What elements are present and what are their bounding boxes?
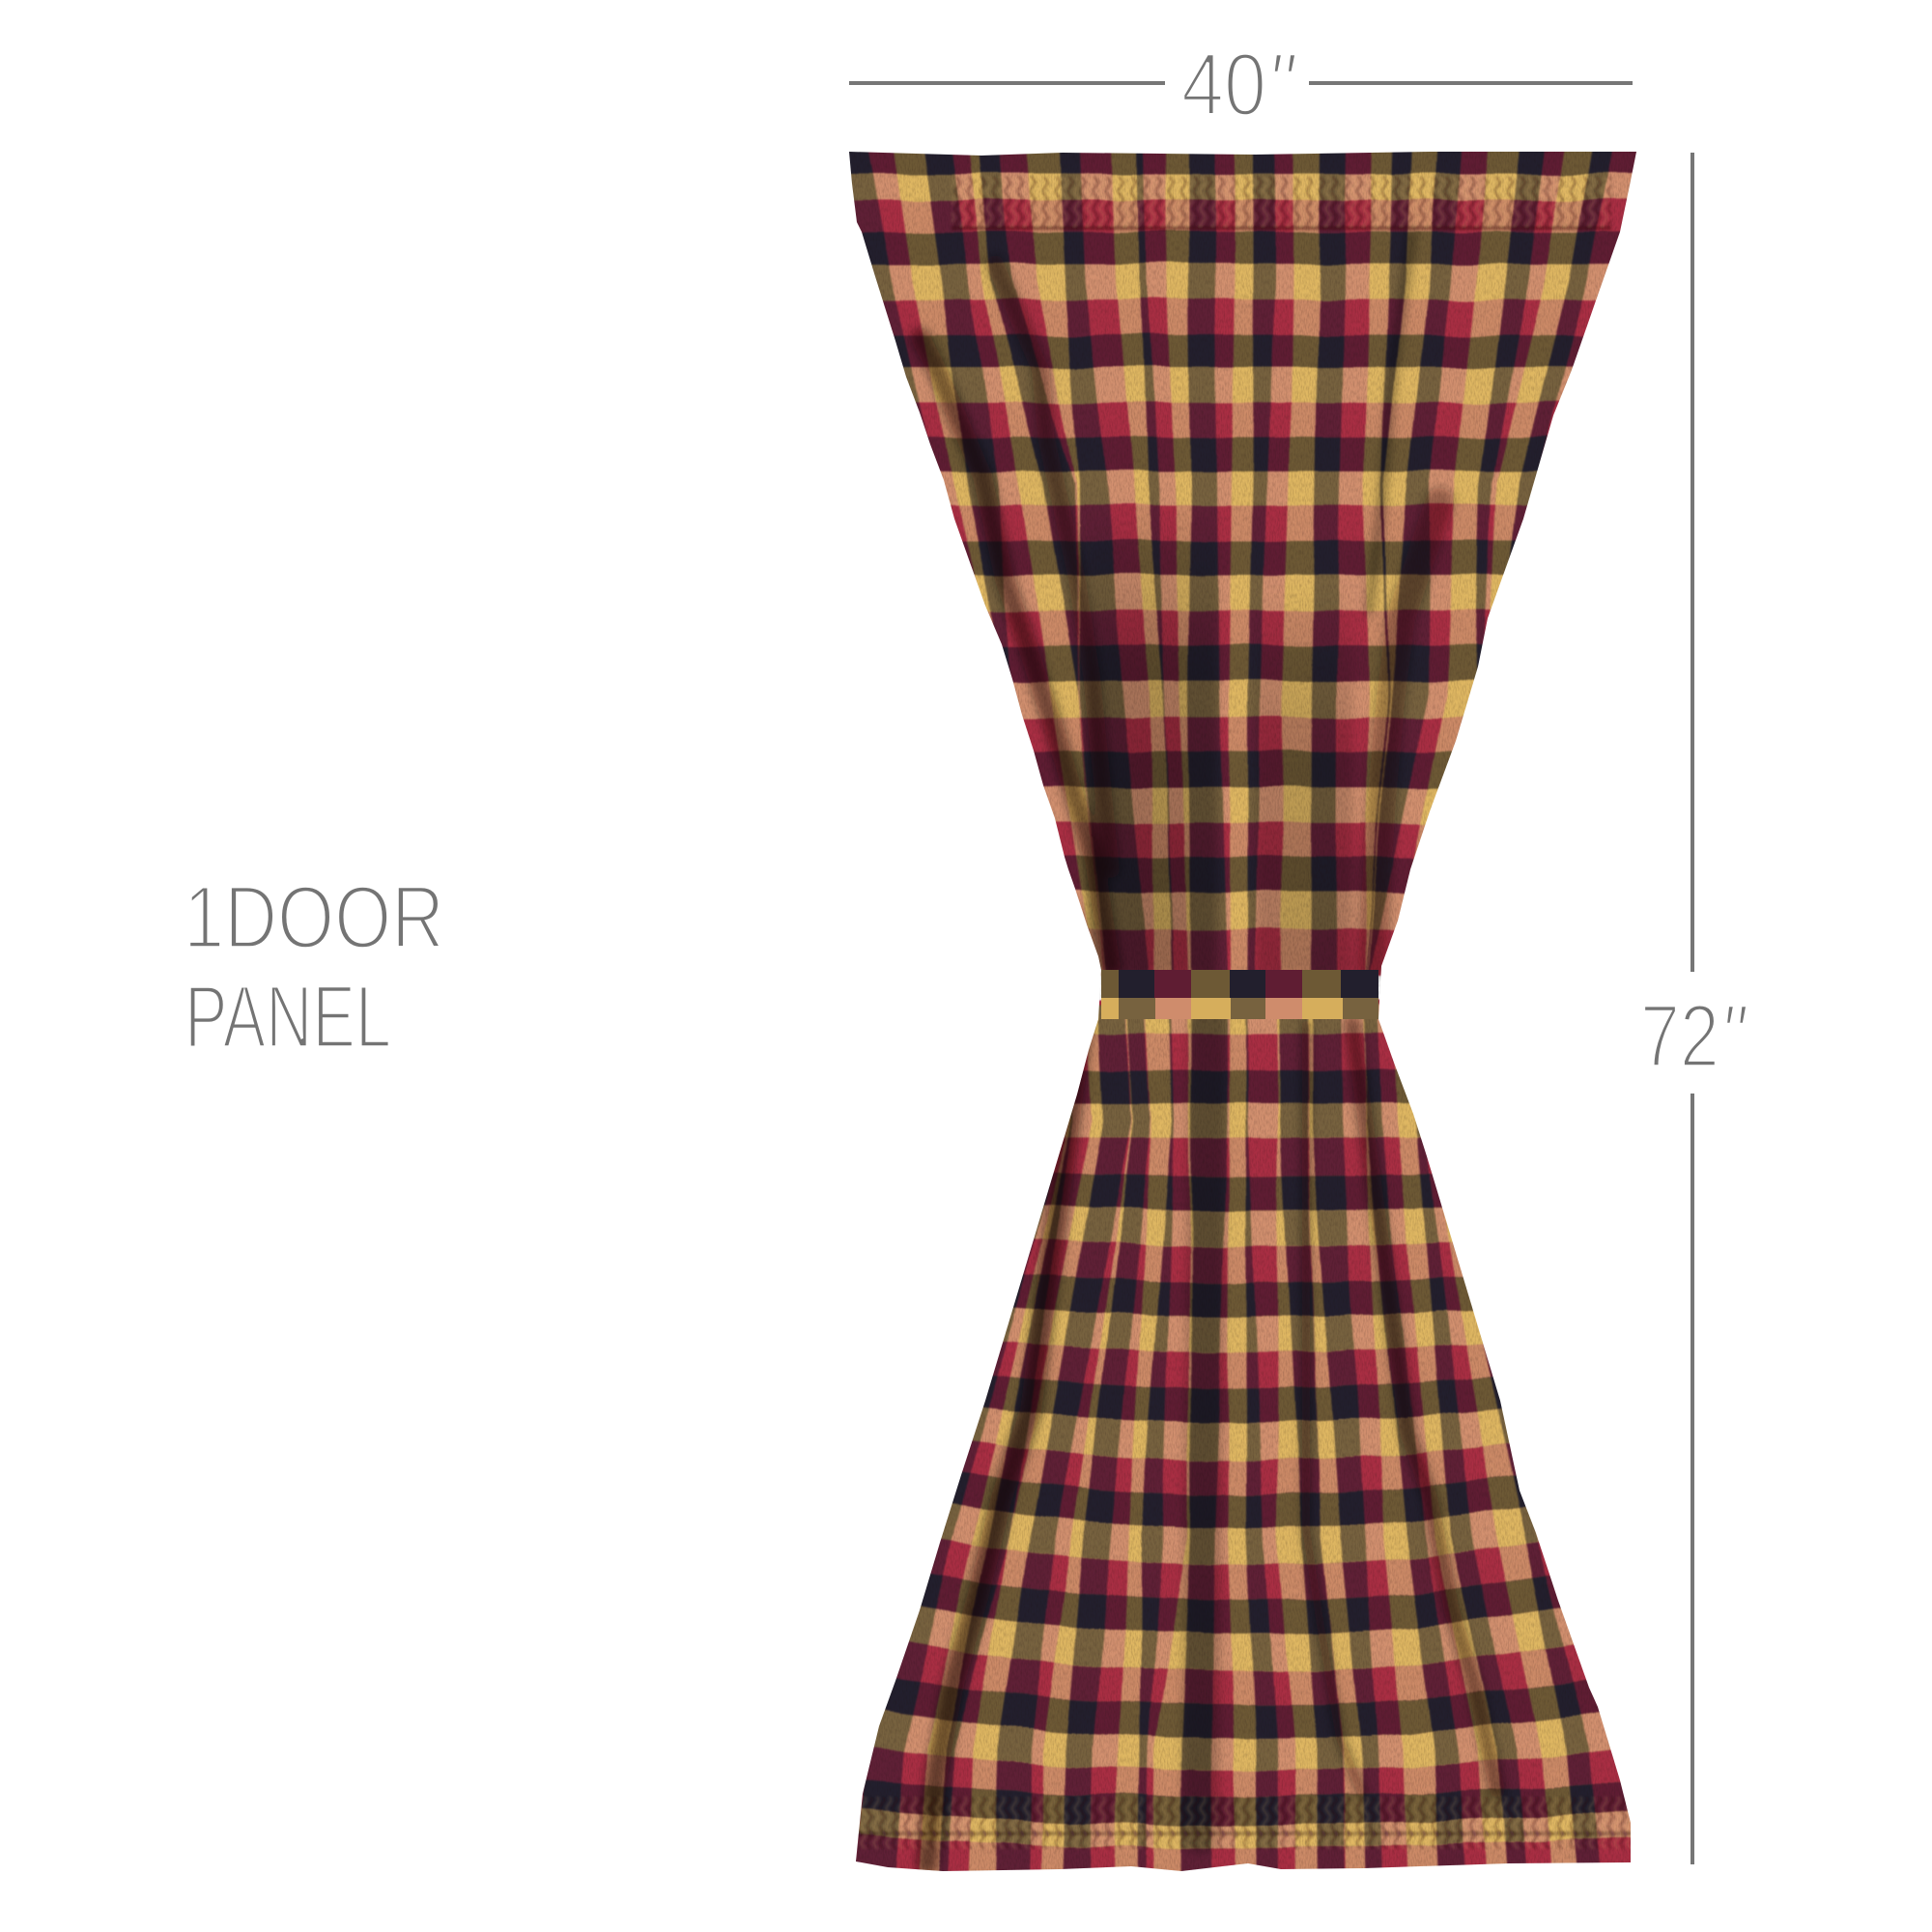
width dimension: 40 inches: 40" — [1181, 36, 1297, 134]
label: 1 door panel: PANEL — [185, 968, 391, 1066]
rod pocket gathers — [952, 177, 1611, 228]
lower fabric: plaid flaring to the hem — [856, 999, 1631, 1871]
upper fabric: plaid fanning into the tie-back — [849, 152, 1636, 977]
centre shading above the tie-back — [1087, 502, 1352, 976]
fold shadows — [921, 232, 1497, 1864]
tie-back band — [1101, 970, 1378, 1019]
woven grain texture — [821, 145, 1662, 1884]
label: 1 door panel — [184, 868, 444, 1066]
curtain panel — [849, 152, 1636, 1871]
height dimension: 72 inches: 72" — [1640, 987, 1747, 1086]
label: 1 door panel: 1DOOR — [184, 868, 444, 967]
bottom hem gathers — [850, 1797, 1633, 1849]
